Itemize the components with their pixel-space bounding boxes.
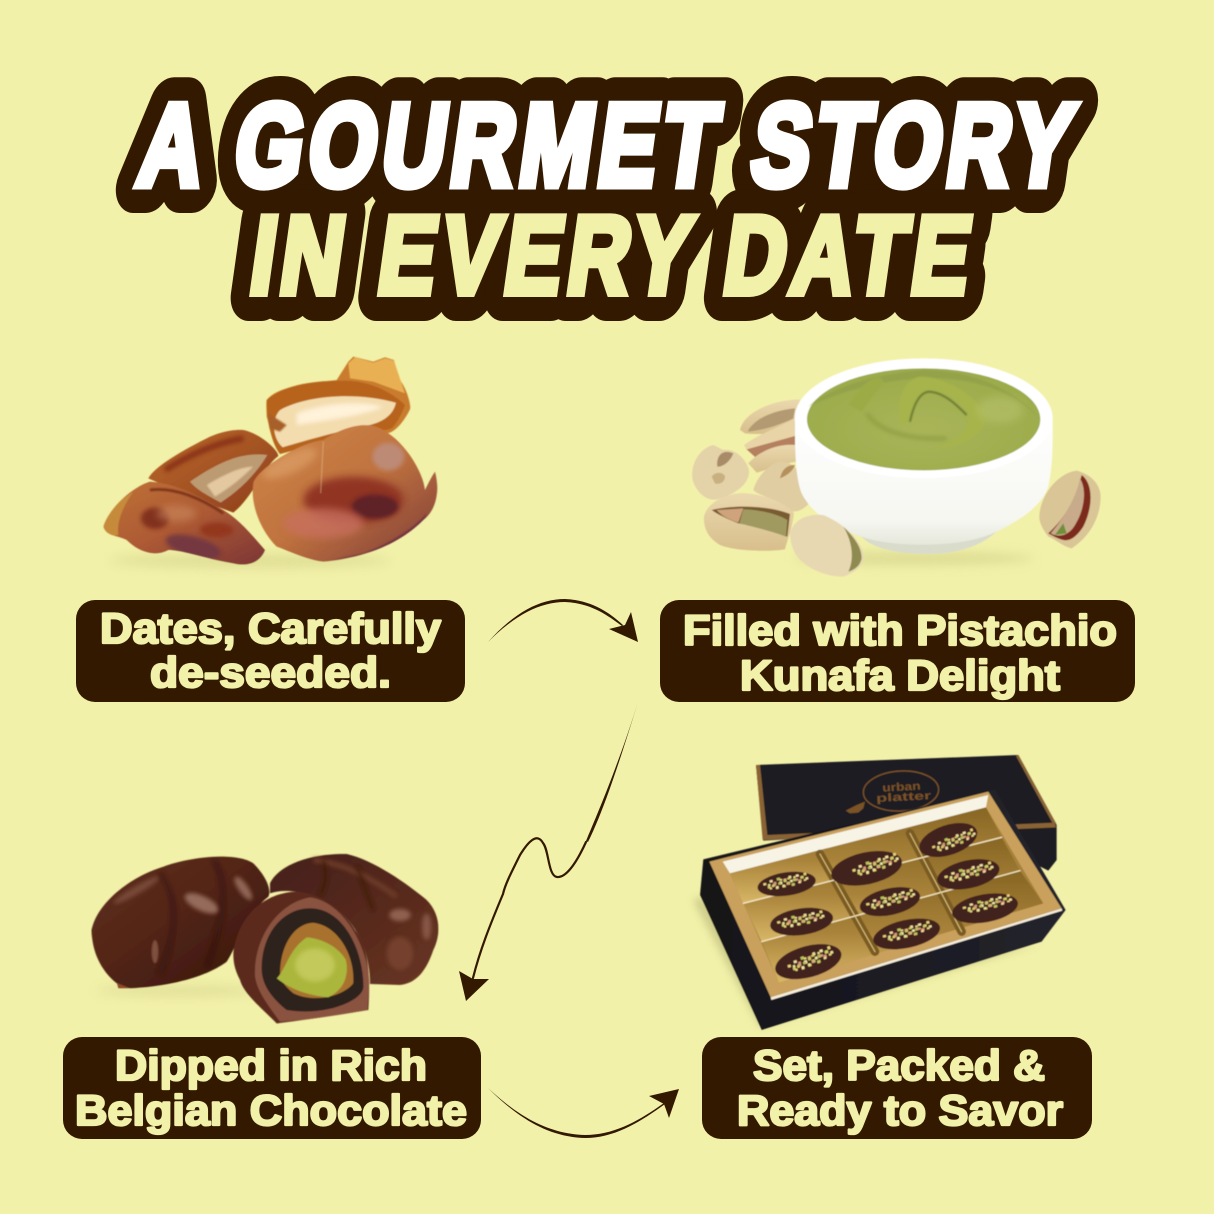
photo: chocolate dipped dates <box>92 854 438 1023</box>
chocolate date, left <box>92 857 269 988</box>
label: dates, carefully de-seeded: Dates, Carefully <box>100 605 441 653</box>
white inner strip <box>723 795 988 873</box>
label: dipped in rich belgian chocolate <box>63 1037 481 1139</box>
label: filled with pistachio kunafa delight <box>660 600 1135 702</box>
photo: de-seeded dates <box>103 357 437 567</box>
label: dipped in rich belgian chocolate: Dipped in Rich <box>115 1042 427 1090</box>
label: dipped in rich belgian chocolate: Belgian Chocolate <box>75 1087 467 1135</box>
pistachio paste <box>807 368 1040 470</box>
date, large front <box>253 425 437 562</box>
label: set, packed and ready to savor <box>702 1037 1092 1139</box>
tray dividers <box>743 833 1020 952</box>
title line 2: IN EVERY DATE <box>244 194 985 317</box>
label: dates, carefully de-seeded <box>76 600 465 702</box>
date, left front <box>103 482 265 565</box>
label: set, packed and ready to savor: Ready to Savor <box>737 1087 1063 1135</box>
chocolate date, right <box>270 854 438 985</box>
box base <box>700 789 1066 1030</box>
arrow: step 1 to step 2 <box>488 599 638 642</box>
pistachios behind bowl <box>692 399 808 511</box>
arrow: step 3 to step 4 <box>488 1088 679 1138</box>
open date, left back <box>148 430 278 513</box>
label: filled with pistachio kunafa delight: Kunafa Delight <box>740 652 1060 700</box>
open date, back <box>266 357 410 454</box>
photo: gift box with dates <box>693 755 1066 1030</box>
box lid with logo <box>756 755 1057 871</box>
label: dates, carefully de-seeded: de-seeded. <box>150 649 391 697</box>
logo: urban <box>882 781 921 795</box>
title: IN EVERY DATE <box>244 194 985 317</box>
logo: platter <box>876 790 932 805</box>
cut chocolate date with pistachio centre <box>233 892 369 1023</box>
pistachios in front of bowl <box>704 471 1101 577</box>
title <box>132 80 1088 317</box>
label: filled with pistachio kunafa delight: Filled with Pistachio <box>683 607 1117 655</box>
photo: pistachio paste bowl <box>692 358 1101 577</box>
chocolate dates in box <box>756 816 1020 986</box>
gold tray <box>730 807 1043 983</box>
logo <box>862 769 940 813</box>
label: set, packed and ready to savor: Set, Packed & <box>753 1042 1045 1090</box>
arrow: step 2 to step 3 <box>459 702 638 1001</box>
bowl <box>795 358 1053 554</box>
